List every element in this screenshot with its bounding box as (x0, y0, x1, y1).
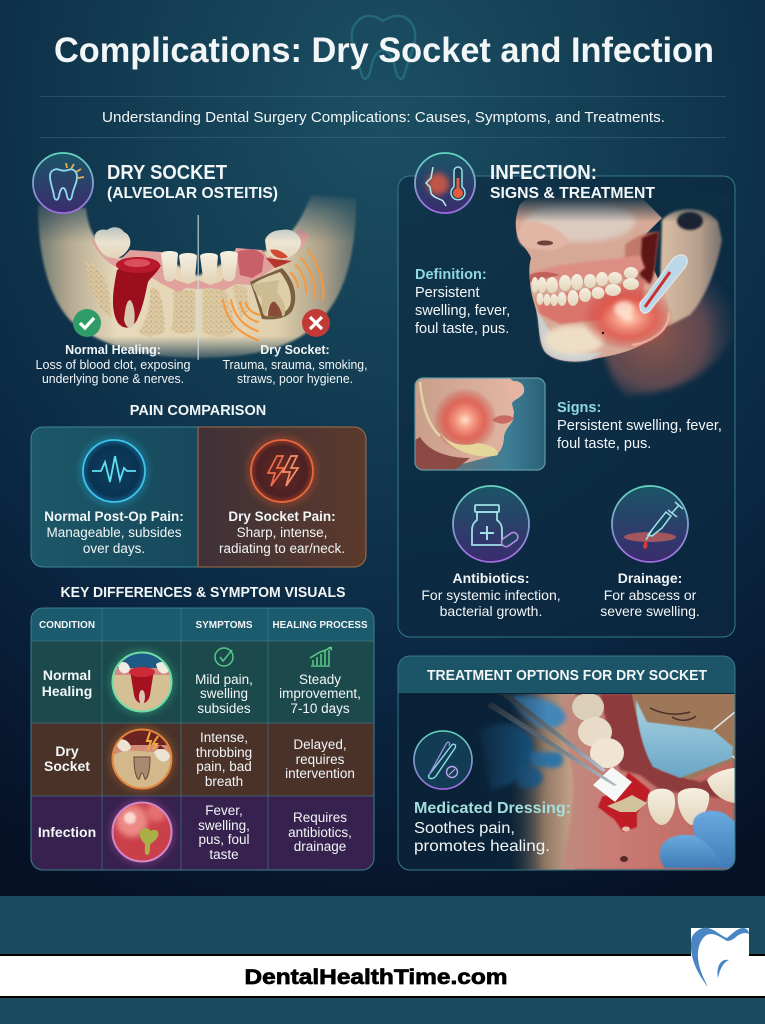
neck shadow (600, 240, 734, 395)
text: antibiotics (421, 570, 561, 619)
text: normal post-op pain: Normal Post-Op Pain: (44, 509, 184, 524)
healing text: Requires (293, 810, 347, 825)
text: drainage: Drainage: (618, 570, 682, 586)
photo: medicated dressing placement (481, 694, 734, 870)
subtitle band: Understanding Dental Surgery Complications: Causes, Symptoms, and Treatments. (102, 109, 665, 126)
text: antibiotics: bacterial growth. (440, 603, 542, 619)
symptoms text: taste (209, 847, 239, 862)
symptoms text: throbbing (196, 745, 252, 760)
front teeth (161, 251, 178, 282)
blood clot (113, 263, 161, 328)
text: dry socket pain (219, 509, 345, 556)
icon: face and thermometer (415, 153, 475, 213)
text: definition (415, 267, 510, 337)
gauze (593, 767, 632, 802)
heading: key differences: KEY DIFFERENCES & SYMPTOM VISUALS (60, 585, 346, 601)
heading: dry socket (107, 162, 278, 202)
heading: infection: INFECTION: (490, 161, 597, 184)
right molar (265, 230, 301, 260)
icon: infection circle (108, 798, 176, 866)
pink gum left (90, 236, 198, 292)
row: dry socket: Socket (44, 758, 90, 774)
text: dry socket pain: radiating to ear/neck. (219, 541, 345, 556)
row: normal healing: Healing (42, 683, 92, 699)
face illustration (505, 196, 734, 395)
symptoms text (198, 803, 250, 862)
table header (39, 620, 368, 631)
text: medicated dressing: promotes healing. (414, 838, 550, 855)
jaw illustration (38, 195, 356, 360)
text: medicated dressing: Soothes pain, (414, 820, 515, 837)
table: key differences (31, 608, 374, 870)
icon: normal pain pulse (78, 435, 150, 507)
icon: drainage syringe (612, 486, 688, 562)
empty socket (250, 268, 295, 319)
symptoms text: Fever, (205, 803, 243, 818)
heading: infection (490, 161, 655, 202)
face (632, 694, 735, 780)
logo: blue tooth (691, 928, 749, 987)
healing text: Steady (299, 672, 341, 687)
main flesh of the face (516, 196, 668, 362)
mouth cavity (625, 232, 659, 284)
forehead highlight (525, 202, 635, 242)
tweezers (500, 694, 606, 772)
symptoms text: pus, foul (198, 832, 250, 847)
icon: tweezers and pill (414, 731, 472, 789)
gums above the teeth (532, 255, 645, 290)
lower teeth (648, 789, 675, 825)
symptoms text: swelling, (198, 818, 250, 833)
heading: pain comparison: PAIN COMPARISON (130, 403, 266, 419)
text: definition: foul taste, pus. (415, 321, 509, 337)
text: normal post-op pain: over days. (83, 541, 145, 556)
right glove fingers (693, 811, 735, 868)
caption: dry socket causes (222, 343, 368, 386)
icon: check mark (215, 648, 233, 666)
treatment header: TREATMENT OPTIONS FOR DRY SOCKET (427, 668, 707, 684)
healing text: antibiotics, (288, 825, 352, 840)
caption: dry socket causes: Dry Socket: (260, 343, 330, 357)
text: definition: Persistent (415, 285, 479, 301)
text: normal post-op pain: Manageable, subsides (46, 525, 182, 540)
panel: infection (398, 153, 735, 637)
text: drainage: severe swelling. (600, 603, 700, 619)
swelling (582, 286, 674, 350)
treatment header (398, 656, 735, 693)
row: normal healing: Normal (43, 667, 91, 683)
panel: treatment options (398, 656, 740, 870)
healing text: intervention (285, 766, 355, 781)
healing text: 7-10 days (290, 701, 350, 716)
symptoms text: Intense, (200, 730, 248, 745)
title: Complications: Dry Socket and Infection (54, 31, 714, 70)
row: infection (38, 798, 352, 866)
healing text: Delayed, (293, 737, 347, 752)
caption: dry socket causes: straws, poor hygiene. (237, 372, 353, 386)
heading: dry socket: DRY SOCKET (107, 162, 227, 184)
table header: SYMPTOMS (195, 620, 253, 631)
text: antibiotics: Antibiotics: (452, 570, 530, 586)
heading: infection: SIGNS & TREATMENT (490, 185, 655, 202)
symptoms text: breath (205, 774, 243, 789)
symptoms text: swelling (200, 686, 248, 701)
text: definition: swelling, fever, (415, 303, 510, 319)
symptoms text: subsides (197, 701, 251, 716)
left molar (95, 227, 130, 258)
icon: normal socket (108, 648, 176, 716)
icon: antibiotics (453, 486, 529, 562)
pale chin (544, 325, 604, 355)
text: drainage: For abscess or (604, 587, 697, 603)
row: dry socket: Dry (55, 743, 79, 759)
socket (598, 772, 650, 832)
healing text: improvement, (279, 686, 361, 701)
table header: HEALING PROCESS (272, 620, 368, 631)
icon: improvement chart (310, 647, 332, 666)
icon: dry socket pain bolts (246, 435, 318, 507)
cheek and jaw bone (660, 209, 722, 326)
table header: CONDITION (39, 620, 95, 631)
icon: dry socket circle (108, 725, 176, 793)
caption: normal healing: Normal Healing: (65, 343, 161, 357)
symptoms text (195, 672, 253, 716)
symptoms text (196, 730, 252, 789)
inset illustration: swollen cheek (415, 378, 545, 470)
icon: red cross (302, 309, 330, 337)
text: definition: Definition: (415, 267, 487, 283)
gloves (510, 696, 566, 728)
gums under the teeth (535, 280, 645, 324)
text: medicated dressing: Medicated Dressing: (414, 800, 571, 817)
row: infection: Infection (38, 824, 96, 840)
mouth interior (600, 694, 735, 800)
icon: green check (73, 309, 101, 337)
text: signs: Persistent swelling, fever, (557, 418, 722, 434)
footer band (0, 896, 765, 1024)
text: normal post-op pain (44, 509, 184, 556)
text: signs (557, 400, 722, 452)
panel: dry socket (33, 153, 368, 386)
text: medicated dressing (414, 800, 571, 855)
symptoms text: Mild pain, (195, 672, 253, 687)
text: drainage (600, 570, 700, 619)
caption: normal healing (36, 343, 191, 386)
footer website text: DentalHealthTime.com (244, 966, 508, 989)
row: normal healing (42, 647, 361, 716)
pink gum right (198, 228, 310, 290)
heading: dry socket: (ALVEOLAR OSTEITIS) (107, 185, 278, 202)
pale bluish rim of the chin (537, 310, 604, 361)
healing text (288, 810, 352, 854)
text: dry socket pain: Dry Socket Pain: (228, 509, 336, 524)
text: dry socket pain: Sharp, intense, (237, 525, 327, 540)
text: antibiotics: For systemic infection, (421, 587, 561, 603)
text: signs: foul taste, pus. (557, 436, 651, 452)
healing text: drainage (294, 839, 346, 854)
row: dry socket (44, 725, 355, 793)
icon: tooth with pain rays (33, 153, 93, 213)
teeth (532, 267, 639, 306)
faint tooth emblem behind title (352, 16, 415, 79)
healing text (279, 672, 361, 716)
surgical mask (636, 700, 733, 778)
symptoms text: pain, bad (196, 759, 252, 774)
caption: normal healing: Loss of blood clot, exposing (36, 358, 191, 372)
caption: dry socket causes: Trauma, srauma, smoking, (222, 358, 368, 372)
upper teeth (572, 693, 604, 721)
icon: thermometer on jaw (640, 255, 687, 313)
panel: pain comparison (31, 427, 366, 567)
nose (518, 221, 568, 250)
healing text (285, 737, 355, 781)
fade on top (505, 196, 733, 222)
caption: normal healing: underlying bone & nerves. (42, 372, 184, 386)
text: signs: Signs: (557, 400, 601, 416)
healing text: requires (296, 752, 345, 767)
